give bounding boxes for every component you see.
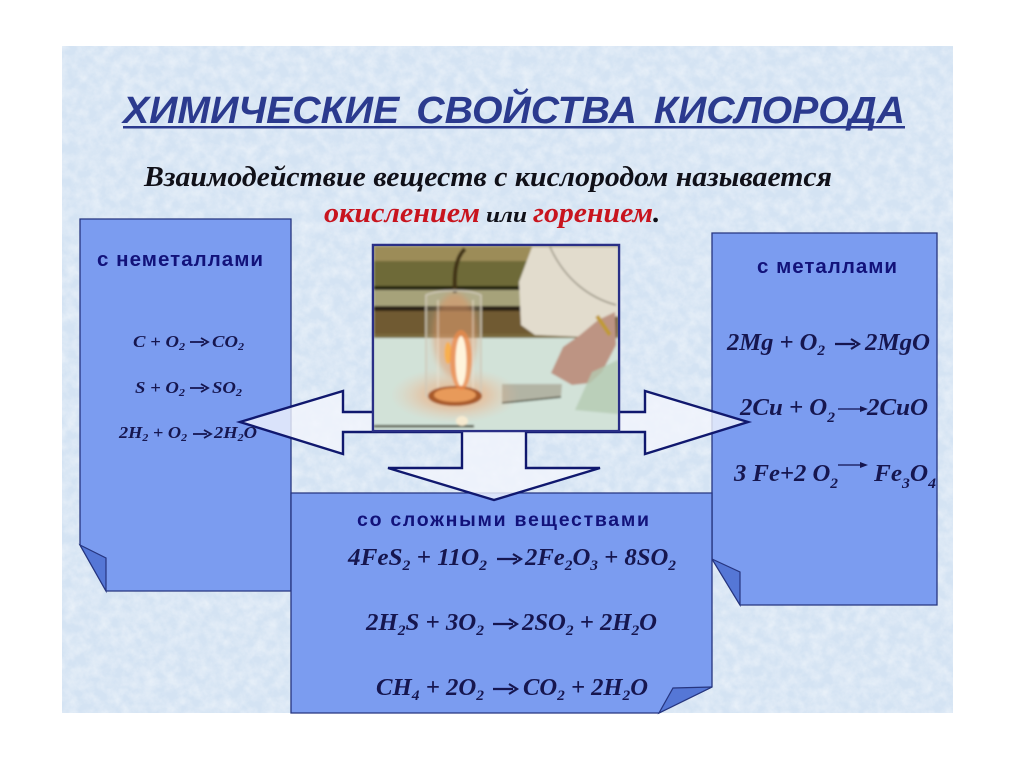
- panel fold: [659, 687, 712, 713]
- panel: with complex substances: [291, 493, 712, 713]
- panel: with metals: [712, 233, 937, 605]
- intro text: [143, 161, 832, 229]
- panel fold: [712, 559, 740, 605]
- metals reactions: 2Mg + O: [727, 330, 815, 356]
- complex substances reactions: + 2H: [574, 610, 633, 636]
- metals reactions: 2MgO: [864, 330, 930, 356]
- intro text: Взаимодействие веществ с кислородом называется: [143, 161, 832, 193]
- non-metals reactions: 2: [178, 341, 186, 353]
- intro text: .: [653, 197, 660, 229]
- complex substances reactions: [347, 545, 677, 704]
- non-metals reactions: 2: [235, 387, 243, 399]
- complex substances reactions: 3: [589, 558, 599, 574]
- complex substances reactions: + 8SO: [598, 545, 668, 571]
- complex substances reactions: 2: [397, 623, 406, 639]
- metals heading: с металлами: [757, 255, 897, 278]
- non-metals reactions: [118, 332, 257, 444]
- non-metals reactions: SO: [212, 378, 234, 397]
- intro text: или: [486, 202, 527, 227]
- non-metals reactions: C + O: [133, 332, 175, 351]
- non-metals reactions: 2: [237, 341, 245, 353]
- complex substances reactions: 2: [564, 558, 573, 574]
- complex substances reactions: 4FeS: [348, 545, 400, 571]
- complex substances reactions: 2SO: [522, 610, 565, 636]
- panel: with non-metals: [80, 219, 291, 591]
- metals reactions: [726, 330, 937, 492]
- complex substances reactions: 2: [556, 688, 565, 704]
- metals reactions: Fe: [874, 461, 901, 487]
- metals reactions: 2: [816, 343, 826, 359]
- photo: burning in a glass jar: [373, 245, 619, 431]
- complex substances reactions: 2: [475, 688, 485, 704]
- complex substances heading: со сложными веществами: [357, 509, 649, 531]
- complex substances reactions: 2: [401, 558, 411, 574]
- textured slide background: [62, 46, 953, 713]
- complex substances reactions: O: [572, 545, 590, 571]
- non-metals reactions: + O: [148, 423, 181, 442]
- arrows: left, right and down from the photo: [240, 391, 748, 500]
- metals reactions: 2: [829, 476, 839, 492]
- complex substances reactions: + 2O: [420, 675, 476, 701]
- complex substances reactions: 4: [411, 688, 420, 704]
- intro text: горением: [533, 197, 653, 229]
- metals reactions: 4: [927, 476, 937, 492]
- metals reactions: O: [910, 461, 928, 487]
- complex substances reactions: 2: [478, 558, 488, 574]
- metals reactions: 3: [901, 476, 910, 492]
- non-metals heading: с неметаллами: [97, 248, 263, 271]
- complex substances reactions: 2H: [366, 610, 397, 636]
- non-metals reactions: 2: [141, 432, 149, 444]
- complex substances reactions: + 11O: [410, 545, 479, 571]
- title: ХИМИЧЕСКИЕ СВОЙСТВА КИСЛОРОДА: [121, 87, 905, 132]
- complex substances reactions: CO: [523, 675, 556, 701]
- metals reactions: 3 Fe+2 O: [734, 461, 828, 487]
- complex substances reactions: S + 3O: [406, 610, 476, 636]
- non-metals reactions: 2: [237, 432, 244, 444]
- intro text: окислением: [324, 197, 480, 229]
- complex substances reactions: 2Fe: [525, 545, 564, 571]
- non-metals reactions: CO: [212, 332, 236, 351]
- non-metals reactions: 2: [180, 432, 188, 444]
- complex substances reactions: 2: [630, 623, 640, 639]
- complex substances reactions: 2: [622, 688, 631, 704]
- complex substances reactions: O: [639, 610, 657, 636]
- non-metals reactions: S + O: [135, 378, 175, 397]
- non-metals reactions: 2H: [119, 423, 141, 442]
- complex substances reactions: CH: [376, 675, 411, 701]
- non-metals reactions: 2: [178, 387, 186, 399]
- non-metals reactions: O: [244, 423, 257, 442]
- complex substances reactions: + 2H: [565, 675, 624, 701]
- complex substances reactions: 2: [565, 623, 574, 639]
- metals reactions: 2CuO: [866, 395, 928, 421]
- metals reactions: 2: [826, 410, 836, 426]
- complex substances reactions: 2: [475, 623, 485, 639]
- complex substances reactions: O: [630, 675, 648, 701]
- non-metals reactions: 2H: [214, 423, 236, 442]
- complex substances reactions: 2: [667, 558, 677, 574]
- panel fold: [80, 545, 106, 591]
- metals reactions: 2Cu + O: [740, 395, 824, 421]
